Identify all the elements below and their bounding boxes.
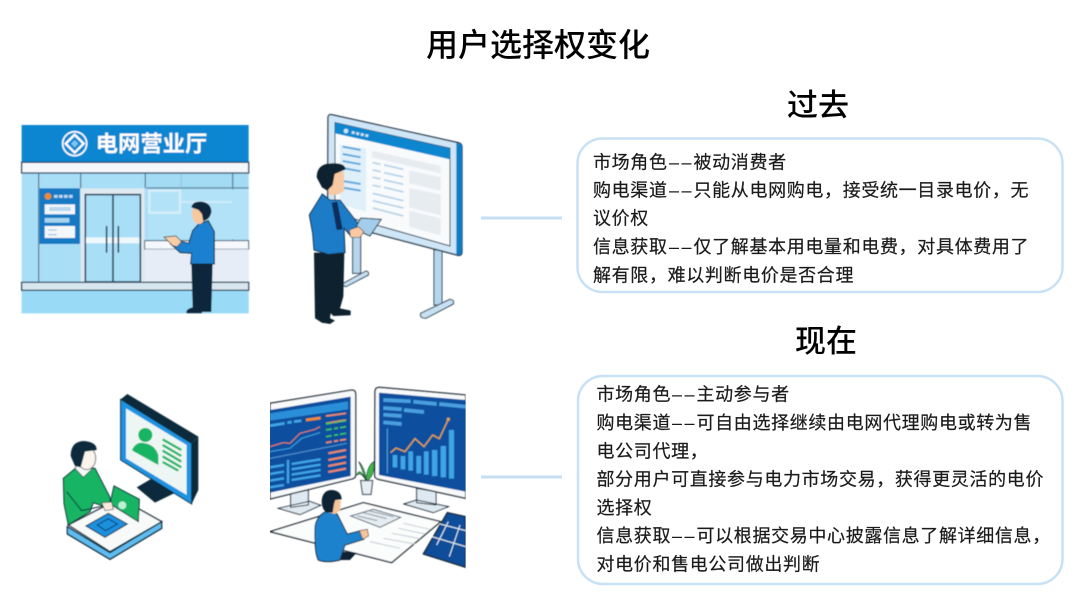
panel: present: –– — [672, 526, 697, 546]
person — [186, 263, 213, 313]
illustration: man at display board — [309, 115, 462, 324]
panel: past: –– — [669, 237, 694, 257]
title: 用户选择权变化 — [426, 27, 650, 63]
panel: past: 购电渠道 — [593, 180, 668, 200]
heading: past: 过去 — [787, 88, 849, 123]
illustration: grid business hall — [22, 125, 249, 313]
illustration: analyst with dashboards — [270, 387, 466, 567]
left monitor — [278, 490, 321, 515]
panel: present: 信息获取 — [596, 526, 671, 546]
panel: present: –– — [672, 413, 697, 433]
panel: past: –– — [669, 152, 694, 172]
person — [340, 551, 357, 561]
illustration: user at desk with monitor — [63, 394, 198, 559]
panel: present: –– — [672, 384, 697, 404]
desk — [67, 522, 162, 559]
panel: past: 解有限，难以判断电价是否合理 — [593, 266, 854, 286]
plant — [361, 481, 373, 494]
connector: present — [481, 476, 562, 478]
logo — [63, 132, 87, 156]
panel: present: 选择权 — [596, 498, 652, 518]
panel: present: 市场角色 — [596, 384, 671, 404]
panel: present: 电公司代理， — [596, 442, 708, 462]
panel: past: 被动消费者 — [694, 152, 787, 172]
solar panel — [423, 513, 466, 567]
panel: past — [578, 138, 1062, 292]
desk — [270, 503, 441, 563]
panel: past: 市场角色 — [593, 152, 668, 172]
panel: past: 只能从电网购电，接受统一目录电价，无 — [694, 180, 1029, 200]
panel: present: 可自由选择继续由电网代理购电或转为售 — [696, 413, 1032, 433]
panel: present: 主动参与者 — [696, 384, 790, 404]
person — [63, 467, 110, 525]
panel: present: 可以根据交易中心披露信息了解详细信息， — [696, 526, 1051, 546]
panel: past: 信息获取 — [593, 237, 668, 257]
person — [314, 253, 351, 324]
panel: past: 仅了解基本用电量和电费，对具体费用了 — [694, 237, 1029, 257]
illustration: grid business hall: 电网营业厅 — [96, 132, 207, 157]
panel: present: 部分用户可直接参与电力市场交易，获得更灵活的电价 — [596, 470, 1044, 490]
connector: past — [481, 216, 562, 220]
heading: present: 现在 — [795, 324, 857, 359]
panel: present: 对电价和售电公司做出判断 — [596, 554, 820, 574]
panel: present — [578, 376, 1062, 584]
right monitor — [404, 488, 448, 513]
panel: present: 购电渠道 — [596, 413, 671, 433]
panel: past: 议价权 — [593, 208, 649, 228]
panel: past: –– — [669, 180, 694, 200]
